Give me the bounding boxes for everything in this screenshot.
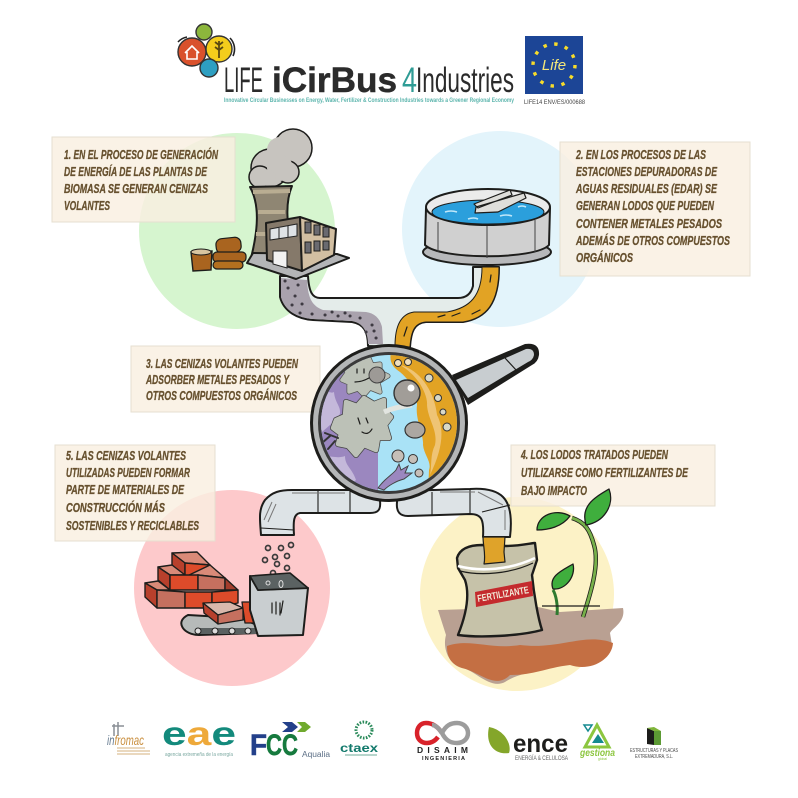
box 1 <box>52 137 235 222</box>
box 2: CONTENER METALES PESADOS <box>576 217 722 231</box>
bricks <box>145 552 238 608</box>
large microbe <box>333 398 391 455</box>
partner logo: eae: eae <box>162 715 236 752</box>
box 3: OTROS COMPUESTOS ORGÁNICOS <box>146 388 297 403</box>
hopper <box>250 573 308 636</box>
header logo <box>178 24 514 104</box>
partner logo: gestiona: gestiona <box>579 748 615 759</box>
platform <box>247 253 349 279</box>
conveyor belt <box>181 602 257 635</box>
box 4: BAJO IMPACTO <box>521 484 587 498</box>
falling ash drops <box>262 542 294 576</box>
box 2: GENERAN LODOS QUE PUEDEN <box>576 199 715 213</box>
plants <box>537 489 611 617</box>
tank body <box>423 239 551 265</box>
box 1: DE ENERGÍA DE LAS PLANTAS DE <box>64 164 207 179</box>
partner logo: eae: agencia extremeña de la energía <box>165 752 233 758</box>
project code: LIFE14 ENV/ES/000688 <box>524 99 585 106</box>
box 5: 5. LAS CENIZAS VOLANTES <box>66 449 186 463</box>
upper pipes <box>280 267 499 347</box>
water treatment tank <box>423 189 551 265</box>
box 2: ESTACIONES DEPURADORAS DE <box>576 165 717 179</box>
icon: circular economy circles <box>178 24 235 77</box>
box 2: ORGÁNICOS <box>576 250 633 265</box>
particles <box>394 380 420 406</box>
lower right faucet <box>397 489 511 537</box>
magnifier <box>310 344 539 502</box>
box 3 <box>131 346 320 412</box>
logo wordmark: LIFE <box>224 61 263 100</box>
background circle: red <box>134 490 330 686</box>
box 5: UTILIZADAS PUEDEN FORMAR <box>66 466 190 480</box>
lens ring <box>310 344 468 502</box>
sludge flow <box>395 267 499 347</box>
box 2: 2. EN LOS PROCESOS DE LAS <box>575 148 706 162</box>
box 1: VOLANTES <box>64 199 110 213</box>
partner logo: infromac: infromac <box>107 732 144 748</box>
box 5 <box>55 445 215 541</box>
partner logo: DISAIM: DISAIM <box>417 745 468 755</box>
box 2: ADEMÁS DE OTROS COMPUESTOS <box>575 233 730 248</box>
handle <box>452 344 539 405</box>
partner logo: estructuras y placas: ESTRUCTURAS Y PLACAS <box>630 748 679 754</box>
box 2: AGUAS RESIDUALES (EDAR) SE <box>575 182 717 196</box>
partner logo: gestiona <box>579 725 615 761</box>
cooling tower <box>250 186 292 262</box>
bridge <box>474 190 526 213</box>
background circle: yellow <box>420 497 614 691</box>
partner logo: FCC Aqualia: F <box>250 729 267 762</box>
partner logo: DISAIM: INGENIERIA <box>422 756 465 762</box>
logo wordmark: 4 <box>402 61 417 100</box>
partner logo: ence <box>488 727 568 762</box>
small microbe <box>342 356 388 395</box>
partner logo: ence: ence <box>513 730 568 758</box>
partner logo: ence: ENERGÍA & CELULOSA <box>515 755 568 762</box>
water <box>432 200 544 224</box>
smoke <box>249 129 312 188</box>
partner logo: estructuras y placas: EXTREMADURA, S.L. <box>635 754 673 760</box>
partner logo: FCC Aqualia: CC <box>266 729 298 762</box>
box 5: CONSTRUCCIÓN MÁS <box>66 500 165 515</box>
EU LIFE flag: Life <box>542 57 566 74</box>
box 4: 4. LOS LODOS TRATADOS PUEDEN <box>520 448 669 462</box>
bag label: FERTILIZANTE <box>477 585 530 605</box>
background circle: green <box>139 133 335 329</box>
partner logo: ctaex: ctaex <box>340 741 378 755</box>
background circle: blue <box>402 131 598 327</box>
ash flow <box>281 278 383 344</box>
partner logo: FCC Aqualia <box>250 722 331 762</box>
box 4 <box>511 445 715 506</box>
box 3: ADSORBER METALES PESADOS Y <box>145 373 290 387</box>
lens contents <box>321 355 457 491</box>
EU LIFE flag <box>525 36 583 94</box>
box 5: PARTE DE MATERIALES DE <box>66 483 184 497</box>
box 1: 1. EN EL PROCESO DE GENERACIÓN <box>64 147 219 162</box>
logo tagline: Innovative Circular Businesses on Energy, Water, Fertilizer & Construction Industries towards a Greener Regional Economy <box>224 97 514 104</box>
partner logo: DISAIM <box>417 723 468 762</box>
soil <box>438 607 623 684</box>
box 3: 3. LAS CENIZAS VOLANTES PUEDEN <box>146 357 299 371</box>
logo wordmark <box>224 61 514 100</box>
logo wordmark: iCirBus <box>272 61 397 100</box>
partner logo: FCC Aqualia: Aqualia <box>302 750 331 759</box>
partner logo: ctaex <box>340 722 378 755</box>
partner logo: estructuras y placas <box>630 727 679 760</box>
biomass pot and logs <box>191 237 246 271</box>
box 5: SOSTENIBLES Y RECICLABLES <box>66 519 199 533</box>
fertilizer bag <box>457 537 542 636</box>
hand <box>378 464 412 490</box>
factory illustration <box>191 129 349 279</box>
box 2 <box>560 142 750 276</box>
building <box>266 217 336 271</box>
partner logo: gestiona: global <box>598 757 607 761</box>
fertilizer stream <box>483 537 505 564</box>
logo wordmark: Industries <box>416 61 514 100</box>
box 4: UTILIZARSE COMO FERTILIZANTES DE <box>521 466 688 480</box>
box 1: BIOMASA SE GENERAN CENIZAS <box>64 182 208 196</box>
lower left faucet <box>260 490 380 535</box>
partner logo: infromac <box>107 722 150 754</box>
ash particles <box>285 281 376 338</box>
